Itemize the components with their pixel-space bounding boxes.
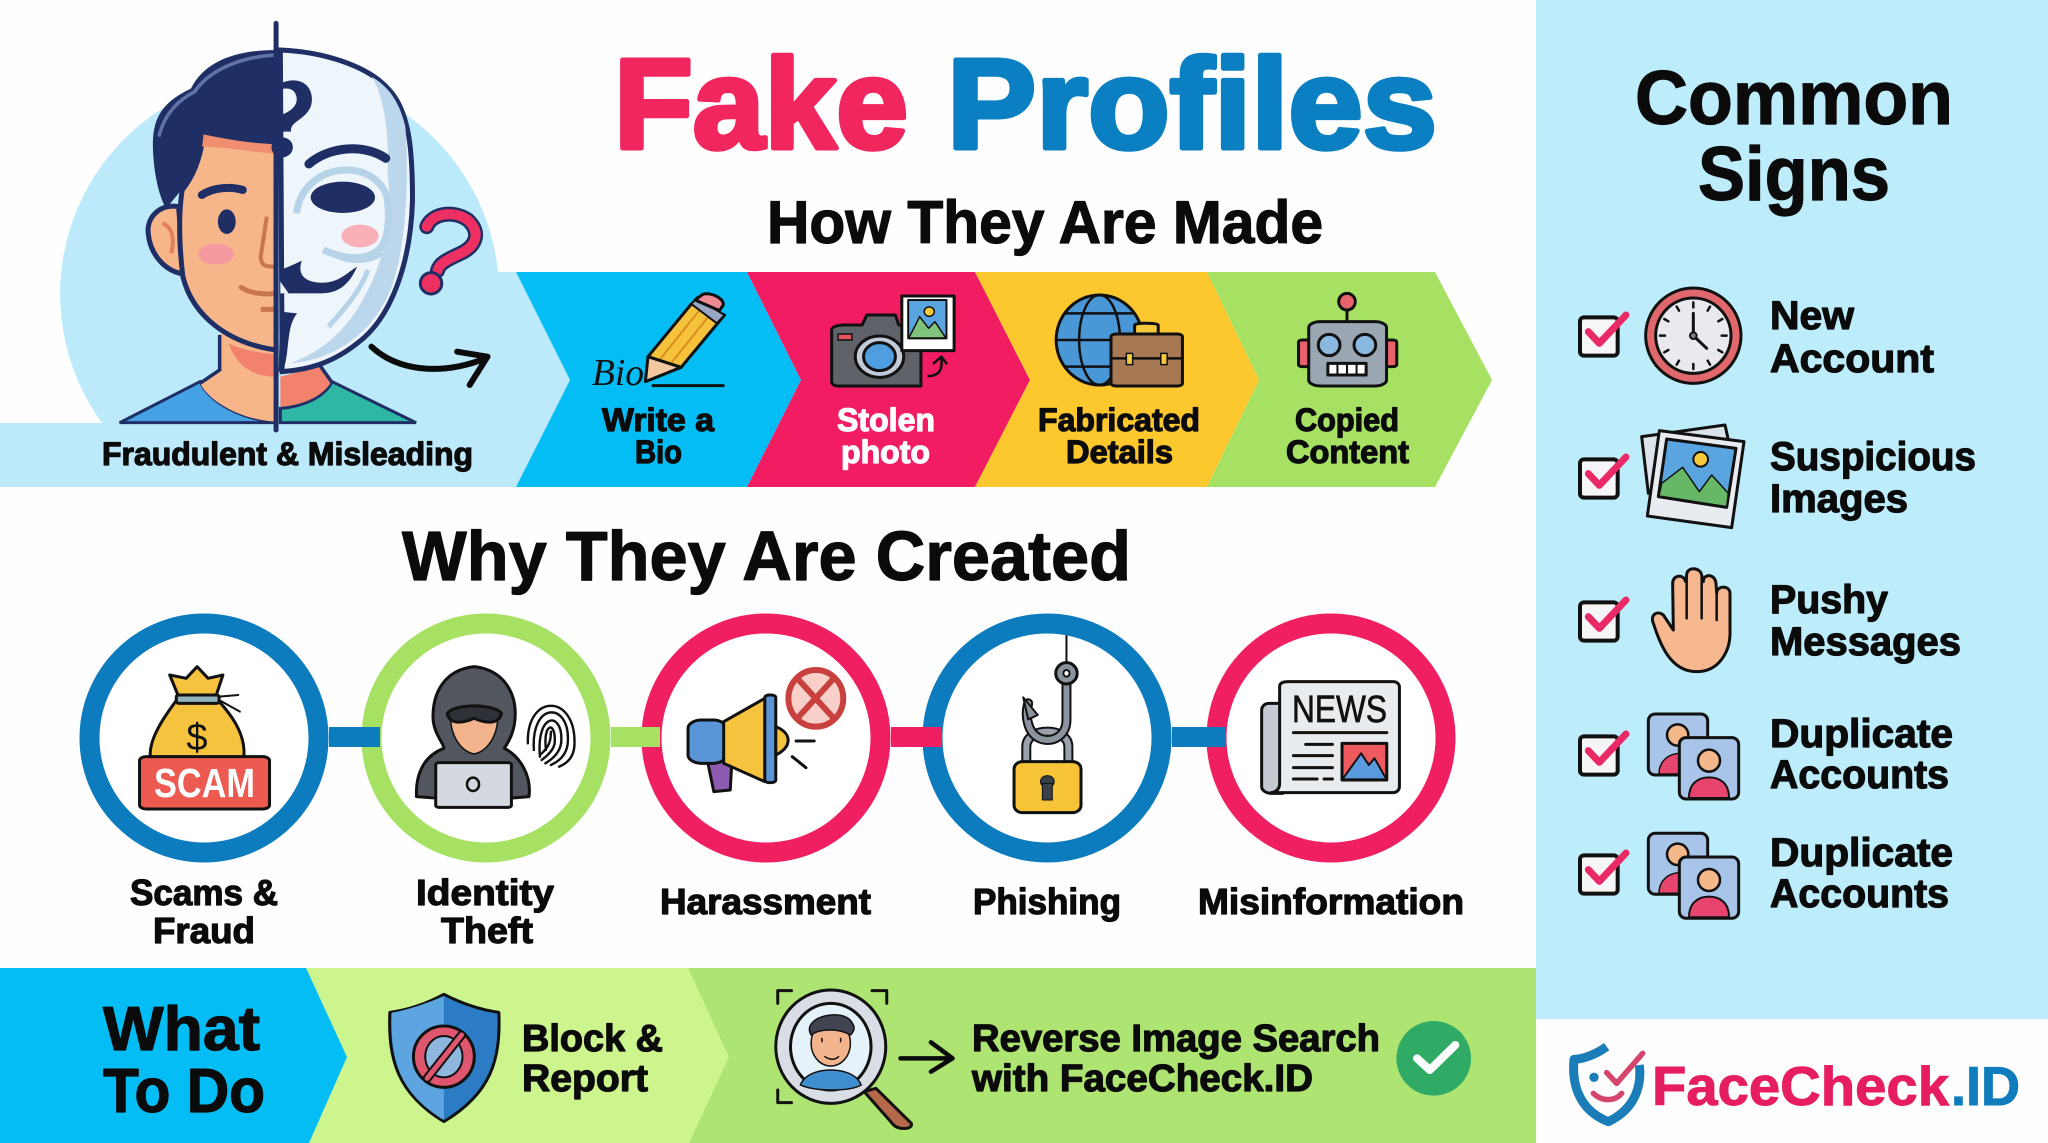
face left half xyxy=(180,134,276,350)
icon: duplicate profiles xyxy=(1648,833,1739,918)
heading: what to do: To Do xyxy=(103,1057,265,1126)
shirt xyxy=(120,382,416,423)
connector: pink xyxy=(891,727,942,747)
label: harassment: Harassment xyxy=(660,881,871,922)
sign row: duplicate accounts one xyxy=(1580,712,1953,799)
icon: globe and briefcase xyxy=(1056,295,1182,386)
sign row: suspicious images xyxy=(1580,425,1976,528)
label: scams and fraud: Fraud xyxy=(153,910,255,951)
title word: Profiles: Profiles xyxy=(947,33,1437,176)
caption: fraudulent and misleading: Fraudulent & Misleading xyxy=(102,436,473,472)
label: Duplicate xyxy=(1770,712,1953,756)
ring: identity theft xyxy=(372,624,600,852)
icon: hacker with fingerprint xyxy=(416,667,575,807)
label: Duplicate xyxy=(1770,831,1953,875)
label xyxy=(1770,435,1976,521)
checkbox xyxy=(1580,853,1626,894)
panel: hero background shape xyxy=(0,75,570,487)
icon: shield with block sign xyxy=(390,994,499,1122)
checkbox xyxy=(1580,600,1626,641)
label: write a bio xyxy=(602,402,714,470)
label: Messages xyxy=(1770,620,1961,664)
label: phishing: Phishing xyxy=(973,881,1121,922)
ear xyxy=(148,206,184,274)
sign row: pushy messages xyxy=(1580,569,1961,672)
label: reverse image search xyxy=(971,1018,1380,1100)
checkbox xyxy=(1580,734,1626,775)
label: stolen photo xyxy=(837,402,935,470)
label: fabricated details: Details xyxy=(1066,434,1173,470)
label: scams and fraud: Scams & xyxy=(130,872,278,913)
heading: common signs xyxy=(1635,56,1953,217)
label: Accounts xyxy=(1770,872,1949,916)
band: light green xyxy=(300,968,729,1143)
connector: blue xyxy=(329,727,380,747)
chevron: copied content xyxy=(1207,272,1492,487)
label: Account xyxy=(1770,337,1934,381)
label: write a bio: Write a xyxy=(602,402,714,438)
heading: what to do: What xyxy=(103,995,260,1064)
ring: harassment xyxy=(652,624,880,852)
text: FaceCheck: FaceCheck xyxy=(1652,1055,1949,1117)
label xyxy=(1770,831,1953,916)
label: copied content: Content xyxy=(1286,434,1409,470)
icon: duplicate profiles xyxy=(1648,714,1739,799)
ring: scams xyxy=(90,624,318,852)
label: stolen photo: Stolen xyxy=(837,402,935,438)
ring: misinformation xyxy=(1216,624,1446,852)
text: .ID: .ID xyxy=(1951,1055,2020,1117)
label: copied content xyxy=(1286,402,1409,470)
icon: hook and padlock xyxy=(1014,636,1081,813)
icon: pencil xyxy=(645,294,725,386)
ring: phishing xyxy=(932,624,1162,852)
heading: what to do xyxy=(103,995,265,1126)
label: write a bio: Bio xyxy=(635,434,682,470)
label: block and report xyxy=(522,1018,663,1100)
sign row: new account xyxy=(1580,288,1934,383)
sign row: duplicate accounts two xyxy=(1580,831,1953,918)
icon: clock xyxy=(1646,288,1741,383)
label: misinformation: Misinformation xyxy=(1198,881,1464,922)
icon: raised hand xyxy=(1652,569,1730,672)
connector: green xyxy=(611,727,660,747)
panel: why they are created xyxy=(90,624,1464,951)
label: stolen photo: photo xyxy=(841,434,930,470)
label: scams and fraud xyxy=(130,872,278,951)
panel: how they are made chevrons xyxy=(516,272,1492,487)
icon: magnifier with face xyxy=(776,990,911,1129)
label xyxy=(1770,712,1953,797)
title xyxy=(614,33,1437,176)
checkbox xyxy=(1580,457,1626,498)
icon: newspaper xyxy=(1262,682,1399,793)
label: New xyxy=(1770,294,1855,338)
title word: Fake: Fake xyxy=(614,33,908,176)
hair highlight xyxy=(159,55,276,137)
icon: red question mark xyxy=(420,214,476,294)
label: Images xyxy=(1770,477,1908,521)
heading: common signs: Signs xyxy=(1698,132,1890,217)
icon: logo shield xyxy=(1574,1047,1643,1122)
panel: common signs background xyxy=(1536,0,2048,1019)
checkbox xyxy=(1580,315,1626,356)
chevron: write a bio xyxy=(516,272,801,487)
text: dollar sign: $ xyxy=(186,717,208,759)
panel: what to do bar xyxy=(0,968,1536,1143)
chevron: stolen photo xyxy=(747,272,1030,487)
label: reverse image search: with FaceCheck.ID xyxy=(971,1058,1313,1100)
band: dark green xyxy=(688,968,1536,1143)
icon: money bag scam xyxy=(140,667,270,809)
label: Pushy xyxy=(1770,578,1889,622)
arrow: to reverse image search xyxy=(900,1042,953,1072)
label: Accounts xyxy=(1770,753,1949,797)
label: fabricated details: Fabricated xyxy=(1038,402,1200,438)
label xyxy=(1770,578,1961,664)
text: news headline: NEWS xyxy=(1292,689,1387,731)
icon: stacked photos xyxy=(1642,425,1744,528)
label: copied content: Copied xyxy=(1295,402,1399,438)
neck xyxy=(200,333,332,422)
logo: facecheck.id xyxy=(1574,1047,2020,1122)
label: block and report: Block & xyxy=(522,1018,663,1060)
text: scam badge: SCAM xyxy=(154,760,255,806)
text: bio script: Bio xyxy=(592,352,644,394)
label: Suspicious xyxy=(1770,435,1976,479)
icon: megaphone xyxy=(688,670,843,792)
icon: green check xyxy=(1396,1021,1471,1096)
hair xyxy=(153,50,276,208)
label: fabricated details xyxy=(1038,402,1200,470)
label xyxy=(1770,294,1934,381)
icon: camera and photo xyxy=(832,296,954,386)
illustration: half face half mask xyxy=(120,23,487,430)
chevron: fabricated details xyxy=(975,272,1259,487)
heading: how they are made: How They Are Made xyxy=(767,189,1323,256)
divider line xyxy=(274,23,279,430)
arrow: curved pointing to process xyxy=(371,347,487,385)
connector: blue second xyxy=(1172,727,1226,747)
label: identity theft: Theft xyxy=(441,910,533,951)
label: reverse image search: Reverse Image Search xyxy=(972,1018,1380,1060)
heading: why they are created: Why They Are Created xyxy=(402,517,1131,595)
label: identity theft xyxy=(416,872,554,951)
label: identity theft: Identity xyxy=(416,872,554,913)
band: blue xyxy=(0,968,347,1143)
mask xyxy=(271,50,412,372)
icon: robot xyxy=(1299,293,1397,386)
label: block and report: Report xyxy=(522,1058,648,1100)
heading: common signs: Common xyxy=(1635,56,1953,141)
